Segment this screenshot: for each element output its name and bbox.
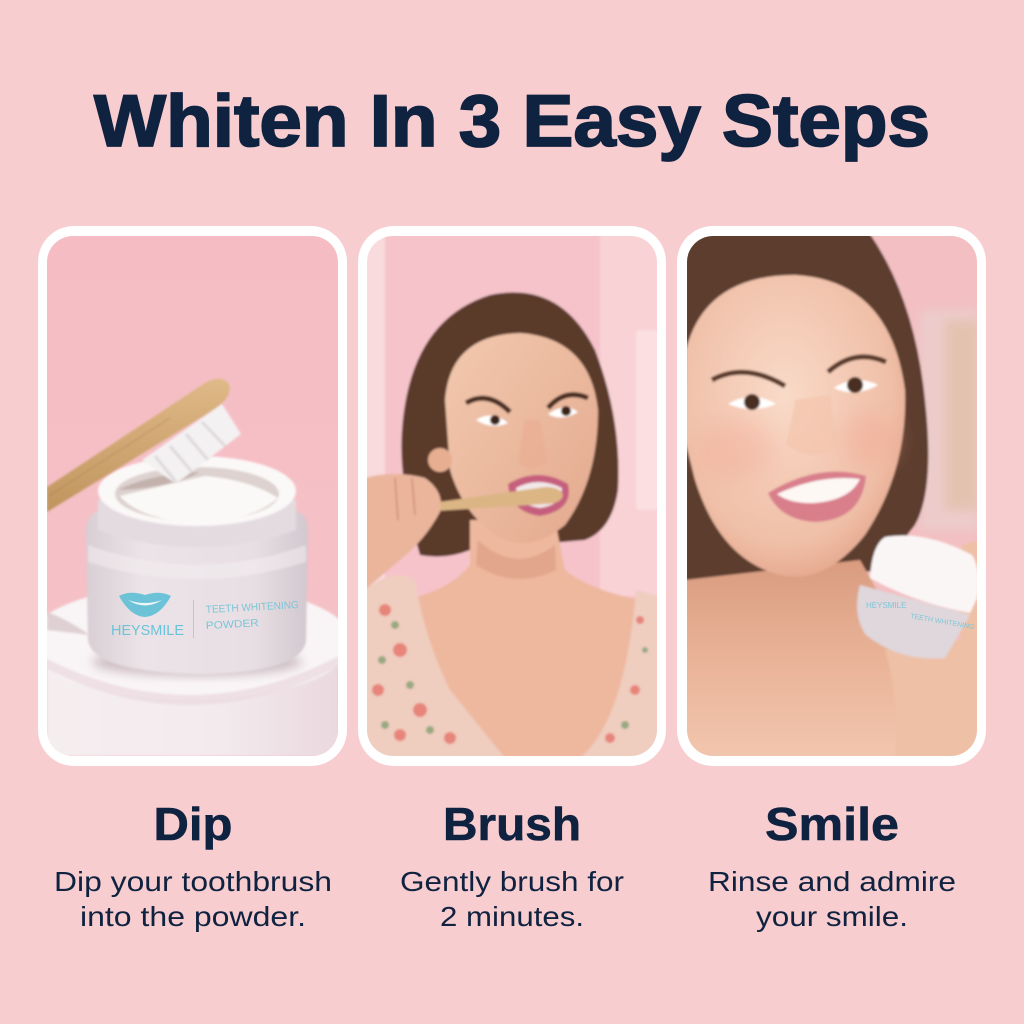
- small jar body: [857, 585, 970, 659]
- small jar label: HEYSMILE: [866, 601, 906, 610]
- toothbrush handle: [418, 487, 563, 512]
- hand and arm: [365, 474, 441, 590]
- neck and chest: [405, 520, 640, 758]
- jar logo: HEYSMILE: [111, 623, 184, 639]
- panel: brush: [358, 226, 666, 766]
- step 3 heading: Smile: [765, 798, 899, 850]
- brows and eyes: [712, 372, 785, 386]
- step 1 text: [54, 866, 332, 932]
- hair: [685, 234, 928, 600]
- jar: [86, 456, 308, 676]
- step 2 text: [400, 866, 624, 932]
- step 3 text: [708, 866, 956, 932]
- step 2 text: Gently brush for: [400, 866, 624, 897]
- mouth: [508, 475, 569, 516]
- smile: [768, 472, 866, 522]
- hand: [885, 540, 979, 758]
- face: [685, 275, 905, 577]
- jar logo: POWDER: [206, 617, 260, 632]
- jar logo: [111, 593, 299, 639]
- step 1 heading: Dip: [154, 798, 232, 850]
- small jar label: TEETH WHITENING: [910, 613, 975, 631]
- neck and chest: [685, 560, 905, 758]
- panel: dip: [28, 226, 352, 766]
- step 1 text: Dip your toothbrush: [54, 866, 332, 897]
- step 1 text: into the powder.: [80, 901, 306, 932]
- jar logo: TEETH WHITENING: [206, 599, 299, 616]
- eyes: [466, 398, 510, 412]
- pedestal: [47, 596, 338, 756]
- face: [445, 333, 598, 543]
- step 2 heading: Brush: [443, 798, 581, 850]
- small jar lid: [870, 535, 978, 613]
- step 3 text: Rinse and admire: [708, 866, 956, 897]
- hair: [401, 292, 619, 557]
- toothbrush: [47, 379, 241, 512]
- dress: [365, 575, 505, 758]
- title: Whiten In 3 Easy Steps: [94, 81, 930, 162]
- panel: smile: [677, 226, 986, 766]
- small jar label: [866, 602, 974, 629]
- step 2 text: 2 minutes.: [440, 901, 584, 932]
- step 3 text: your smile.: [756, 901, 908, 932]
